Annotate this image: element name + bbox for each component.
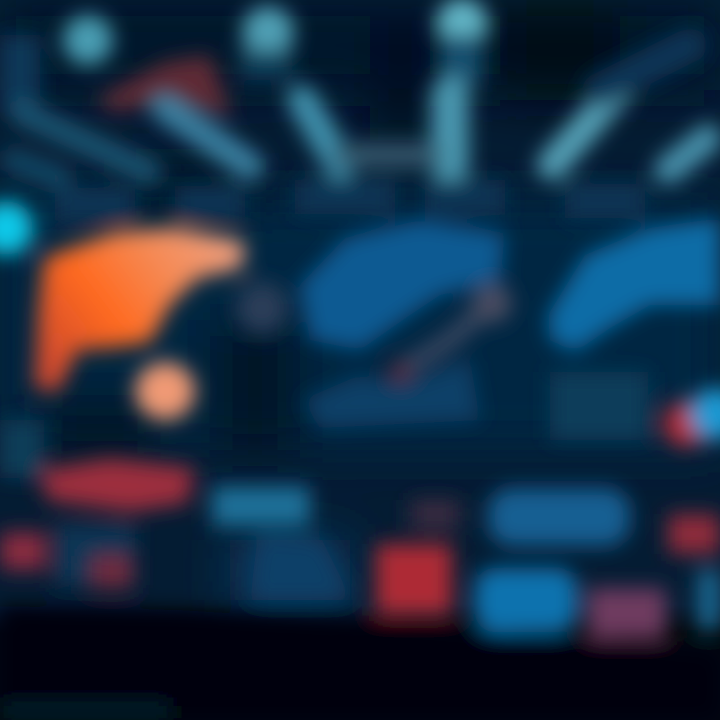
top row: nodes — [0, 0, 488, 105]
left text block — [0, 420, 44, 478]
bottom row: red markers — [0, 500, 720, 638]
red point — [389, 361, 411, 383]
map marker — [236, 282, 288, 334]
top row: red accent — [95, 55, 232, 118]
map shape: peach island — [135, 362, 195, 420]
icon: cyan indicator — [0, 201, 33, 255]
blue status dot — [690, 388, 720, 440]
text block — [550, 372, 648, 440]
bottom row: blue tabs — [55, 486, 720, 632]
lower bars — [302, 360, 480, 428]
trend line — [400, 300, 495, 372]
red banner — [42, 458, 195, 512]
connector strokes — [12, 45, 708, 178]
map shape: right region — [548, 218, 720, 352]
panel: middle blue map — [300, 220, 512, 428]
panel: orange map — [34, 228, 288, 420]
map shape: middle region — [300, 220, 505, 350]
trend marker — [472, 283, 512, 323]
red status dot — [663, 401, 709, 447]
header band — [55, 180, 645, 220]
footer glow — [0, 704, 170, 720]
map shape: orange region — [34, 228, 245, 392]
bottom dark band — [0, 606, 720, 720]
panel: right blue map — [548, 218, 720, 447]
